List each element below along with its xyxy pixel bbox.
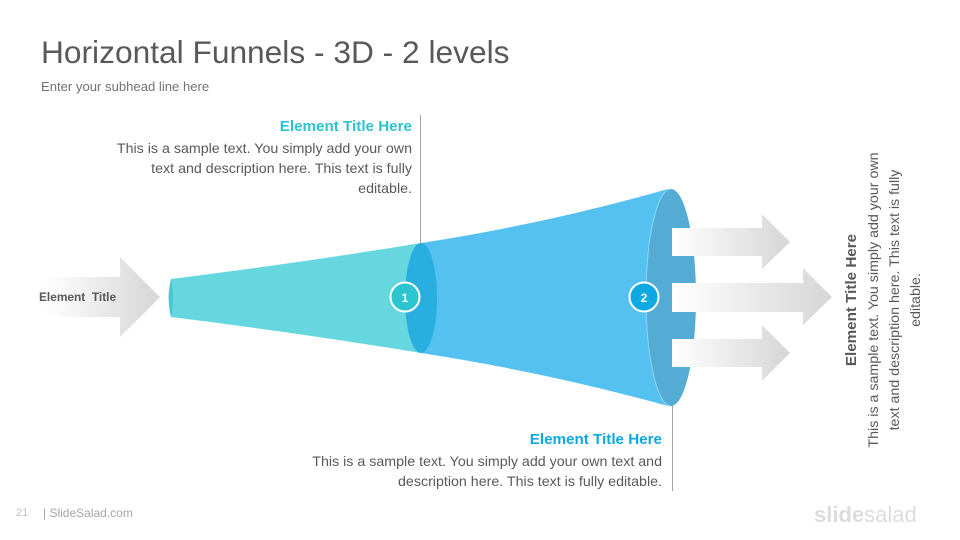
description: level 1: text and description here. This text is fully [151,161,412,177]
input arrow label: Element Title [39,290,116,304]
description: level 1 [117,141,412,197]
footer source: | SlideSalad.com [43,506,133,520]
leader line: bottom [672,405,674,491]
description: level 1: This is a sample text. You simply add your own [117,141,412,157]
description: level 2: description here. This text is fully editable. [398,474,662,490]
marker 1: 1 [402,291,409,305]
text block: level 2 [312,431,662,490]
arrow: output bottom [672,325,790,381]
heading: level 2: Element Title Here [530,431,662,448]
rotated text content [843,152,924,448]
description: level 2: This is a sample text. You simply add your own text and [312,454,662,470]
arrow: output top [672,214,790,269]
heading: level 1: Element Title Here [280,118,412,135]
arrow: output middle [672,268,832,325]
description: level 2 [312,454,662,490]
description: output: text and description here. This text is fully [887,170,903,430]
description: output: editable. [908,273,924,327]
text block: level 1 [117,118,412,197]
marker 2: 2 [641,291,648,305]
marker 1 [390,282,420,312]
text block: output, rotated [843,152,924,448]
description: output [866,152,924,448]
description: level 1: editable. [358,181,412,197]
title: Horizontal Funnels - 3D - 2 levels [41,34,509,70]
arrow: input [45,257,160,337]
marker 2 [630,282,658,312]
heading: output: Element Title Here [843,234,860,366]
logo: slidesalad [814,502,917,527]
subhead: Enter your subhead line here [41,79,209,94]
funnel level 1 [168,243,421,353]
description: output: This is a sample text. You simply add your own [866,152,882,448]
leader line: top [420,115,422,244]
funnel level 2 [405,189,696,406]
page number: 21 [16,507,28,519]
